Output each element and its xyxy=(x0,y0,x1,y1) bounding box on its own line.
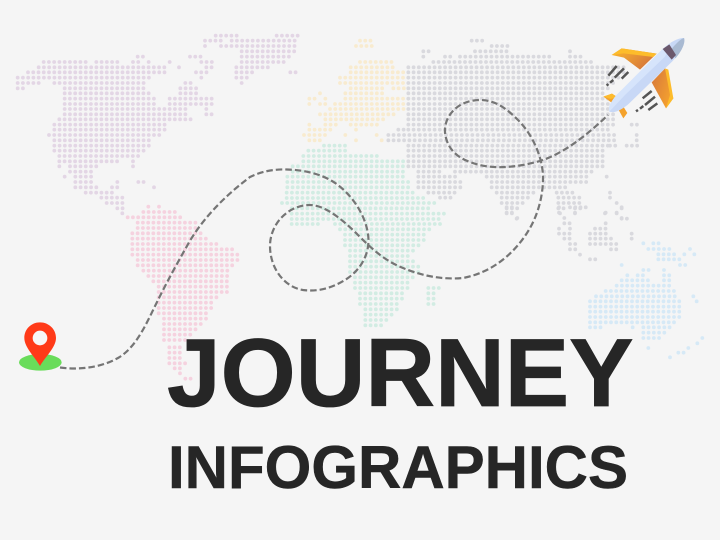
icon: airplane xyxy=(603,38,684,118)
map region: South America xyxy=(128,207,239,379)
subtitle: INFOGRAPHICS: INFOGRAPHICS xyxy=(168,434,628,501)
map region: Asia xyxy=(388,41,639,259)
title: JOURNEY: JOURNEY xyxy=(167,320,634,427)
dashed journey route xyxy=(60,100,608,368)
map region: Australia and Oceania xyxy=(590,243,703,357)
map region: Africa xyxy=(282,146,447,325)
icon: location pin on green base xyxy=(19,322,62,371)
map region: Europe xyxy=(304,41,404,140)
map region: North America and Greenland xyxy=(18,36,300,213)
